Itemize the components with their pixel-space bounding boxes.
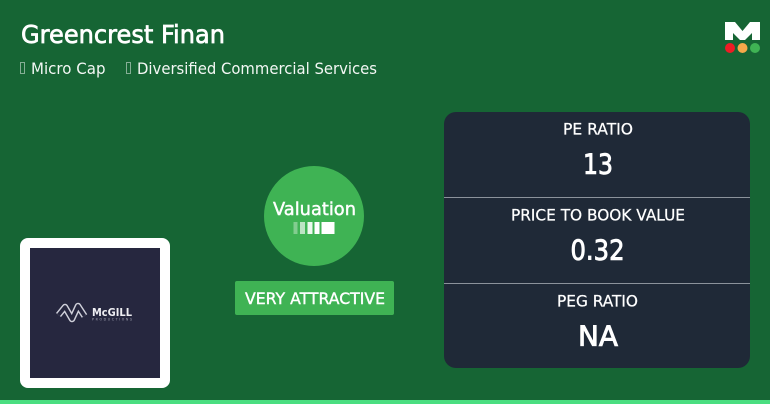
metric: PEG ratio bbox=[557, 292, 638, 352]
badge circle bbox=[264, 166, 364, 266]
rating pill bbox=[235, 281, 394, 315]
price to book label: PRICE TO BOOK VALUE bbox=[511, 206, 685, 224]
logo green dot bbox=[750, 43, 760, 53]
title: Greencrest Finan bbox=[21, 20, 225, 49]
panel background bbox=[444, 112, 750, 368]
price to book value: 0.32 bbox=[570, 234, 624, 266]
PE ratio label: PE RATIO bbox=[563, 120, 633, 138]
logo orange dot bbox=[738, 43, 748, 53]
McGill tagline: PRODUCTIONS bbox=[92, 318, 132, 322]
metrics panel bbox=[444, 112, 750, 368]
pill background bbox=[235, 281, 394, 315]
market cap label: Micro Cap bbox=[31, 59, 106, 78]
valuation badge bbox=[264, 166, 364, 266]
PEG ratio label: PEG RATIO bbox=[557, 292, 638, 310]
card white frame bbox=[20, 238, 170, 388]
McGill mark bbox=[58, 306, 84, 319]
PEG ratio value: NA bbox=[578, 320, 618, 352]
metric: price to book value bbox=[511, 206, 685, 266]
PE ratio value: 13 bbox=[583, 148, 613, 180]
brand logo bbox=[725, 22, 760, 53]
McGill wordmark: McGILL bbox=[92, 307, 132, 319]
bottom accent bar bbox=[0, 400, 770, 404]
subtitle: sector bbox=[126, 59, 377, 78]
icon: sector placeholder bbox=[126, 62, 130, 74]
logo letter M bbox=[725, 22, 760, 40]
metric: PE ratio bbox=[563, 120, 633, 180]
card dark interior bbox=[30, 248, 160, 378]
valuation strength bars bbox=[294, 222, 334, 234]
subtitle: market cap bbox=[20, 59, 106, 78]
pill text: VERY ATTRACTIVE bbox=[245, 289, 385, 308]
badge label: Valuation bbox=[273, 199, 356, 220]
sector label: Diversified Commercial Services bbox=[137, 59, 377, 78]
logo red dot bbox=[725, 43, 735, 53]
company logo card bbox=[20, 238, 170, 388]
icon: market cap placeholder bbox=[20, 62, 24, 74]
